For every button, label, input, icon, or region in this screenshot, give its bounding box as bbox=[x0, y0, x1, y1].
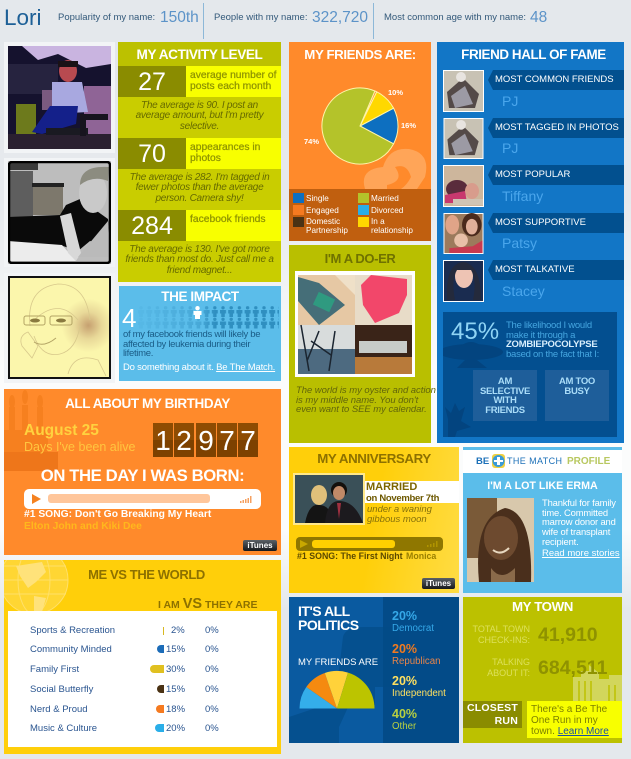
stat: check-ins: TOTAL TOWN bbox=[472, 624, 530, 634]
icon: elephant watermark bbox=[289, 627, 383, 743]
panel: it's all politics bbox=[289, 597, 459, 743]
entry: most talkative: MOST TALKATIVE bbox=[495, 264, 575, 275]
icon: zombie hand watermark bbox=[445, 404, 470, 437]
zombie text bbox=[506, 320, 599, 360]
icon: logo bbox=[492, 454, 505, 468]
heading: FRIEND HALL OF FAME bbox=[461, 47, 606, 62]
photo collage bbox=[295, 271, 415, 377]
percentage: 45% bbox=[451, 318, 499, 345]
row: family: 0% bbox=[205, 664, 219, 675]
row: community: Community Minded bbox=[30, 644, 112, 655]
row: community: 15% bbox=[166, 644, 185, 655]
legend: republican: 20% bbox=[392, 642, 417, 656]
pie chart: 10% bbox=[388, 88, 403, 97]
stat: most common age: Most common age with my name: bbox=[384, 12, 526, 23]
zombie text: make it through a bbox=[506, 330, 575, 340]
run callout: One Run in my bbox=[531, 715, 598, 726]
stat: friends: 284 bbox=[131, 212, 173, 240]
profile text: time. Committed bbox=[542, 507, 608, 518]
legend: independent: 20% bbox=[392, 674, 417, 688]
row: nerd: Nerd & Proud bbox=[30, 704, 88, 715]
days alive label: Days I've been alive bbox=[24, 440, 135, 454]
row: social: Social Butterfly bbox=[30, 684, 93, 695]
heading: MY ACTIVITY LEVEL bbox=[137, 47, 262, 62]
panel: the impact bbox=[119, 286, 281, 381]
row: social bbox=[30, 684, 219, 695]
stat: most common age bbox=[384, 9, 547, 26]
panel: i'm a do-er bbox=[289, 245, 431, 443]
stat: posts: posts each month bbox=[190, 80, 271, 92]
entry: most supportive bbox=[444, 213, 624, 254]
link: Read more stories bbox=[542, 548, 620, 559]
stat: people with my name bbox=[214, 9, 368, 26]
row: nerd: 0% bbox=[205, 704, 219, 715]
note: photos: fewer photos than the average bbox=[136, 182, 263, 193]
note: posts: The average is 90. I post an bbox=[141, 100, 258, 111]
panel: my activity level bbox=[118, 42, 281, 282]
itunes button: iTunes bbox=[426, 579, 451, 588]
entry: most talkative: Stacey bbox=[502, 283, 545, 299]
counter: days alive: 9 bbox=[198, 425, 214, 456]
panel: all about my birthday bbox=[4, 389, 281, 555]
run callout bbox=[527, 701, 622, 738]
option: too busy: BUSY bbox=[564, 386, 590, 396]
caption: is my middle name. You don't bbox=[296, 395, 418, 406]
married band: MARRIED bbox=[366, 481, 417, 493]
row: family bbox=[30, 664, 219, 675]
panel: my town: CLOSEST bbox=[467, 702, 518, 714]
subheading: ON THE DAY I WAS BORN: bbox=[41, 466, 244, 485]
panel: me vs the world bbox=[4, 560, 281, 754]
row: sports: Sports & Recreation bbox=[30, 625, 115, 636]
pie chart bbox=[304, 87, 416, 165]
row: nerd bbox=[30, 704, 219, 715]
stat: talking about it: ABOUT IT: bbox=[487, 668, 530, 678]
legend: independent: Independent bbox=[392, 688, 446, 699]
heading: MY ANNIVERSARY bbox=[317, 451, 431, 466]
counter: days alive: 7 bbox=[240, 425, 256, 456]
stat: check-ins: 41,910 bbox=[538, 624, 598, 646]
stat: posts: average number of bbox=[190, 70, 276, 81]
stat: photos: 70 bbox=[138, 140, 166, 168]
stat: photos: photos bbox=[190, 152, 221, 164]
pie chart: 74% bbox=[304, 137, 319, 146]
note: photos: person. Camera shy! bbox=[155, 193, 244, 204]
icon: birthday cake bbox=[4, 390, 58, 471]
logo band: PROFILE bbox=[567, 456, 610, 467]
icon: ufo watermark bbox=[443, 342, 503, 368]
profile text: marrow donor and bbox=[542, 516, 616, 527]
entry: most common friends bbox=[443, 70, 624, 112]
legend: Divorced bbox=[371, 206, 403, 215]
legend bbox=[289, 189, 431, 241]
heading: POLITICS bbox=[298, 617, 359, 633]
note: friends bbox=[125, 244, 274, 276]
married band bbox=[365, 481, 459, 503]
row: music bbox=[30, 723, 219, 734]
icon: globe bbox=[4, 560, 68, 611]
impact text: affected by leukemia during their bbox=[123, 339, 250, 350]
itunes button bbox=[422, 578, 455, 589]
row: community: 0% bbox=[205, 644, 219, 655]
moon phase bbox=[367, 504, 432, 524]
note: friends: friend magnet... bbox=[167, 265, 232, 276]
stat: photos: appearances in bbox=[190, 142, 260, 153]
note: friends: friends than most do. Just call me a bbox=[125, 254, 274, 265]
entry: most supportive: MOST SUPPORTIVE bbox=[495, 217, 586, 228]
counter: days alive: 1 bbox=[155, 425, 171, 456]
moon phase: under a waning bbox=[367, 504, 432, 515]
caption: even want to SEE my calendar. bbox=[296, 404, 427, 415]
stat: friends bbox=[118, 210, 281, 241]
zombie text: The likelihood I would bbox=[506, 320, 592, 331]
panel: my town bbox=[463, 597, 622, 743]
stat: check-ins: CHECK-INS: bbox=[478, 635, 530, 645]
row: sports bbox=[30, 625, 219, 636]
row: sports: 2% bbox=[171, 625, 185, 636]
entry: most popular: Tiffany bbox=[502, 188, 543, 204]
counter: days alive: 2 bbox=[176, 425, 192, 456]
impact text: lifetime. bbox=[123, 348, 153, 359]
icon: people row bbox=[154, 306, 279, 328]
heading: THE IMPACT bbox=[161, 289, 239, 304]
legend: democrat bbox=[392, 609, 434, 634]
photo: couple bbox=[293, 473, 365, 525]
note: posts: selective. bbox=[180, 121, 219, 132]
row: social: 15% bbox=[166, 684, 185, 695]
entry: most popular bbox=[443, 165, 624, 207]
entry: most common friends: PJ bbox=[502, 93, 518, 109]
legend: relationship bbox=[371, 226, 413, 235]
stat: popularity: Popularity of my name: bbox=[58, 12, 155, 23]
option: too busy: AM TOO bbox=[559, 376, 595, 387]
panel: my anniversary bbox=[289, 447, 459, 593]
heading bbox=[298, 603, 359, 633]
counter: days alive: 7 bbox=[219, 425, 235, 456]
stat: popularity bbox=[58, 9, 199, 26]
pie chart: 16% bbox=[401, 121, 416, 130]
legend: Partnership bbox=[306, 226, 348, 235]
legend: democrat: Democrat bbox=[392, 623, 434, 634]
profile text: Thankful for family bbox=[542, 497, 616, 508]
closest run label bbox=[463, 701, 522, 728]
stat: people with my name: People with my name: bbox=[214, 12, 307, 23]
row: music: Music & Culture bbox=[30, 723, 97, 734]
heading: I'M A LOT LIKE ERMA bbox=[487, 480, 598, 492]
legend: Domestic bbox=[306, 217, 340, 226]
option: selective: WITH bbox=[493, 395, 517, 406]
stat: friends: facebook friends bbox=[190, 214, 266, 225]
stat: talking about it bbox=[463, 657, 622, 687]
run callout: town. Learn More bbox=[531, 726, 609, 737]
semicircle chart bbox=[300, 670, 374, 708]
row: sports: 0% bbox=[205, 625, 219, 636]
audio player bbox=[296, 537, 443, 551]
birthday date: August 25 bbox=[24, 422, 99, 439]
entry: most common friends: MOST COMMON FRIENDS bbox=[495, 74, 614, 85]
heading: MY FRIENDS ARE: bbox=[304, 47, 416, 62]
note: photos: The average is 282. I'm tagged in bbox=[130, 172, 269, 183]
legend: Single bbox=[306, 194, 329, 203]
stat: popularity: 150th bbox=[160, 9, 199, 26]
row: nerd: 18% bbox=[166, 704, 185, 715]
logo band bbox=[463, 450, 622, 473]
option: selective: SELECTIVE bbox=[480, 386, 530, 396]
stat: most common age: 48 bbox=[530, 9, 547, 26]
entry: most tagged in photos: PJ bbox=[502, 140, 518, 156]
legend: republican bbox=[392, 642, 440, 667]
heading: I'M A DO-ER bbox=[325, 251, 395, 266]
legend: other: 40% bbox=[392, 707, 417, 721]
icon: skyline watermark bbox=[573, 665, 622, 715]
legend: In a bbox=[371, 217, 385, 226]
row: social: 0% bbox=[205, 684, 219, 695]
row: family: Family First bbox=[30, 664, 79, 675]
stat: talking about it: 684,511 bbox=[538, 657, 607, 679]
song artist: Elton John and Kiki Dee bbox=[24, 521, 142, 532]
song title: #1 SONG: Don't Go Breaking My Heart bbox=[24, 509, 211, 520]
stat: posts bbox=[118, 66, 281, 97]
row: community bbox=[30, 644, 219, 655]
option: too busy bbox=[545, 370, 609, 421]
profile text bbox=[542, 497, 616, 547]
stat: talking about it: TALKING bbox=[492, 657, 530, 667]
note: posts bbox=[136, 100, 264, 132]
legend: democrat: 20% bbox=[392, 609, 417, 623]
photo: woman on chair bbox=[4, 42, 115, 153]
run callout: There's a Be The bbox=[531, 704, 607, 715]
profile text: wife of transplant bbox=[542, 526, 610, 537]
stat: people with my name: 322,720 bbox=[312, 9, 368, 26]
option: selective: AM bbox=[498, 376, 512, 387]
moon phase: gibbous moon bbox=[367, 514, 427, 524]
panel: zombie likelihood bbox=[443, 312, 617, 437]
legend: independent bbox=[392, 674, 446, 699]
row: music: 0% bbox=[205, 723, 219, 734]
panel: my town: RUN bbox=[495, 715, 518, 727]
profile text: recipient. bbox=[542, 536, 579, 547]
impact text bbox=[123, 329, 260, 359]
impact text: of my facebook friends will likely be bbox=[123, 329, 260, 340]
heading: IT'S ALL bbox=[298, 603, 350, 619]
stat: check-ins bbox=[463, 624, 622, 654]
option: selective: FRIENDS bbox=[485, 404, 525, 416]
panel: my friends are bbox=[289, 42, 431, 241]
legend: Engaged bbox=[306, 206, 339, 215]
caption: The world is my oyster and action bbox=[296, 385, 436, 396]
married band: on November 7th bbox=[366, 493, 439, 504]
stat: posts: 27 bbox=[138, 68, 166, 96]
note: photos bbox=[130, 172, 270, 204]
song title: #1 SONG: The First Night Monica bbox=[297, 551, 436, 561]
big number: 4 bbox=[122, 303, 136, 333]
heading: MY TOWN bbox=[512, 599, 573, 614]
logo text: BE bbox=[476, 456, 489, 467]
zombie text: based on the fact that I: bbox=[506, 348, 599, 360]
chart label: MY FRIENDS ARE bbox=[298, 657, 378, 668]
legend: Married bbox=[371, 194, 399, 203]
note: posts: average amount, but I'm pretty bbox=[136, 110, 263, 121]
name title: Lori bbox=[4, 5, 42, 30]
legend: republican: Republican bbox=[392, 656, 440, 667]
entry: most tagged in photos bbox=[444, 118, 624, 159]
photo: erma bbox=[467, 498, 534, 582]
heading: ME VS THE WORLD bbox=[88, 567, 205, 582]
photo: sketch portrait bbox=[4, 273, 115, 383]
legend: other bbox=[392, 707, 417, 732]
option: selective bbox=[473, 370, 537, 421]
audio player bbox=[24, 489, 261, 509]
itunes button bbox=[243, 540, 277, 551]
row: family: 30% bbox=[166, 664, 185, 675]
entry: most tagged in photos: MOST TAGGED IN PHOTOS bbox=[495, 122, 619, 133]
panel: be the match profile bbox=[463, 447, 622, 593]
call to action: Do something about it. Be The Match. bbox=[123, 362, 275, 373]
counter: days alive bbox=[153, 423, 258, 457]
logo band: THE MATCH bbox=[507, 456, 562, 466]
heading: ALL ABOUT MY BIRTHDAY bbox=[65, 396, 230, 411]
header bar bbox=[4, 3, 547, 39]
panel: friend hall of fame bbox=[437, 42, 624, 443]
icon: heart watermark bbox=[364, 148, 426, 189]
zombie text: ZOMBIEPOCOLYPSE bbox=[506, 339, 597, 350]
photo: woman black and white bbox=[4, 158, 115, 267]
itunes button: iTunes bbox=[247, 541, 273, 550]
entry: most talkative bbox=[443, 260, 624, 302]
entry: most popular: MOST POPULAR bbox=[495, 169, 570, 180]
row: music: 20% bbox=[166, 723, 185, 734]
legend: other: Other bbox=[392, 721, 416, 732]
note: friends: The average is 130. I've got more bbox=[129, 244, 270, 255]
table bbox=[8, 611, 277, 747]
entry: most supportive: Patsy bbox=[502, 235, 537, 251]
caption bbox=[296, 385, 436, 415]
stat: photos bbox=[118, 138, 281, 169]
column headers: I AM VS THEY ARE bbox=[158, 596, 257, 612]
